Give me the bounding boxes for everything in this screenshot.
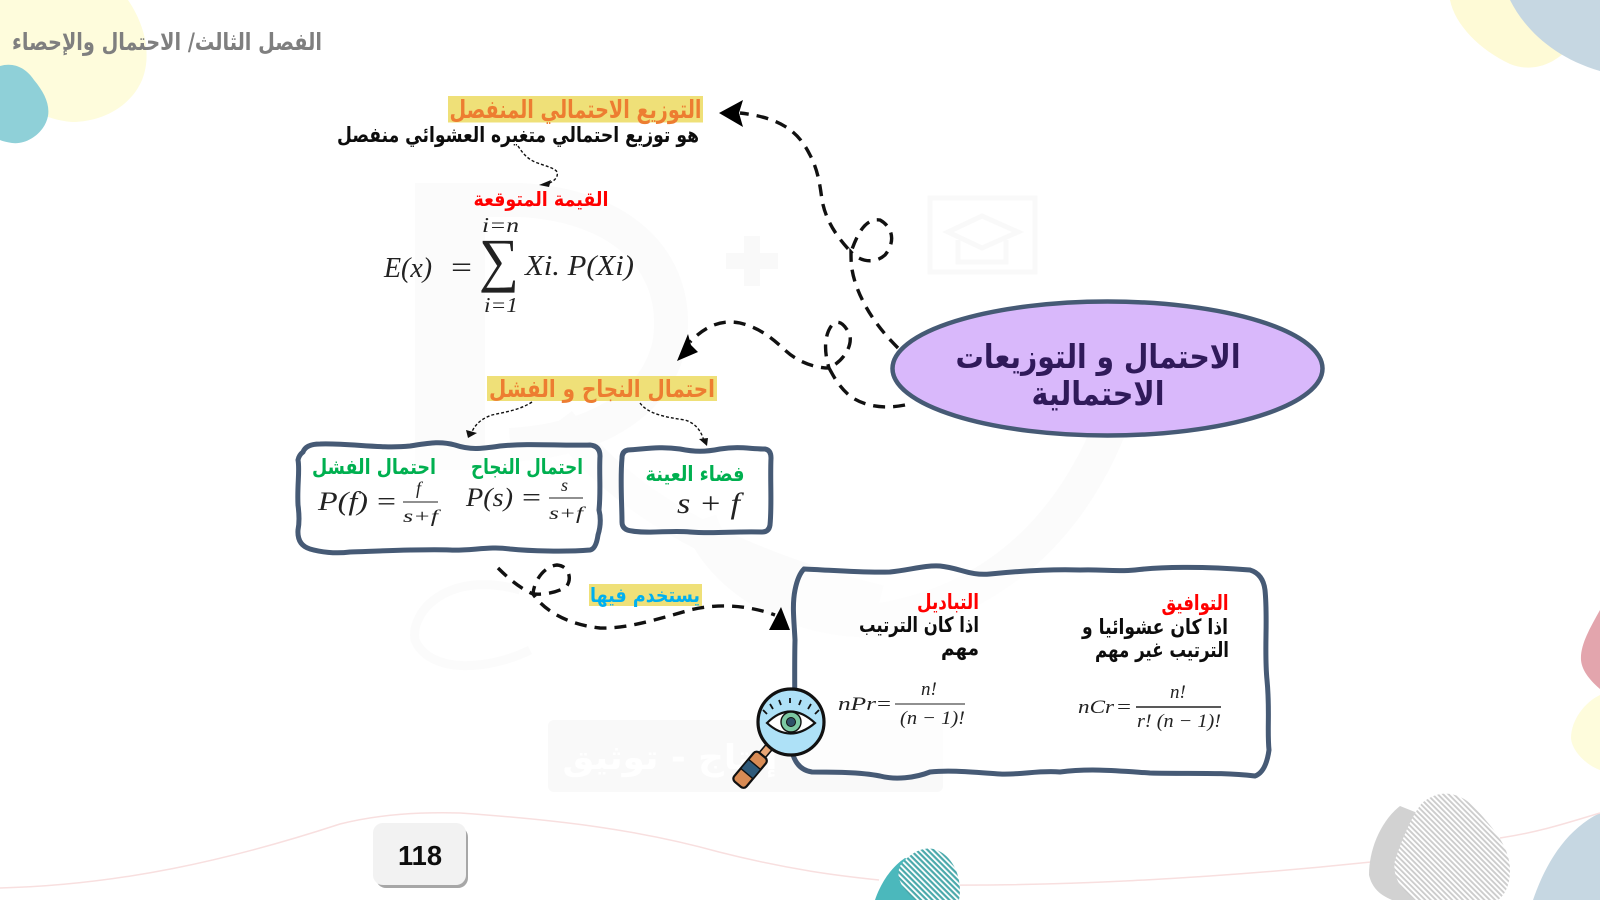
- permutations formula: [838, 679, 965, 729]
- combinations text: [1081, 591, 1229, 662]
- combinations text: التوافيق: [1162, 591, 1228, 615]
- failure formula: s+f: [403, 506, 442, 526]
- dashed arrow: boxes to combinatorics: [498, 565, 790, 630]
- combinations text: اذا كان عشوائيا و: [1081, 615, 1228, 639]
- success formula: P(s): [465, 483, 513, 512]
- success formula: s+f: [549, 503, 587, 523]
- central ellipse: main topic: الاحتمال و التوزيعات: [956, 337, 1240, 377]
- permutations text: اذا كان الترتيب: [859, 613, 979, 637]
- arrowhead: [677, 334, 698, 361]
- combinations text: الترتيب غير مهم: [1095, 638, 1229, 662]
- success formula: [465, 475, 587, 523]
- sample space label: فضاء العينة: [646, 462, 744, 486]
- expected value formula: i=n: [482, 213, 519, 237]
- page number badge: [373, 823, 468, 888]
- sample space formula: s + f: [677, 487, 744, 520]
- highlighted heading: التوزيع الاحتمالي المنفصل: [450, 95, 702, 125]
- small dashed arrow to expected value: [518, 146, 557, 187]
- permutations text: مهم: [941, 636, 979, 660]
- expected value formula: =: [451, 251, 472, 284]
- small dashed arrows to boxes: [466, 402, 708, 446]
- watermark: إنتاج - توثيق: [562, 738, 778, 778]
- central ellipse: main topic: الاحتمالية: [1032, 374, 1164, 413]
- page number badge: 118: [398, 840, 442, 871]
- permutations formula: n!: [921, 679, 937, 700]
- expected value formula: Xi. P(Xi): [524, 250, 634, 282]
- arrowhead: [719, 100, 743, 127]
- failure formula: [317, 478, 442, 526]
- permutations text: التباديل: [917, 590, 979, 614]
- expected value formula: ∑: [479, 227, 519, 293]
- expected value label: القيمة المتوقعة: [474, 187, 608, 211]
- watermark: [415, 198, 1120, 792]
- failure formula: f: [416, 478, 424, 498]
- panel: sample space: [621, 448, 771, 533]
- arrowhead: [769, 607, 790, 630]
- success formula: =: [522, 483, 541, 512]
- expected value formula: [383, 213, 634, 317]
- expected value formula: E(x): [383, 252, 432, 284]
- panel: probability of success and failure: [298, 443, 600, 553]
- combinations formula: =: [1117, 697, 1131, 718]
- expected value formula: i=1: [484, 293, 518, 317]
- used-in label: يستخدم فيها: [590, 583, 700, 607]
- dashed arrow: ellipse to success and failure: [677, 322, 905, 407]
- combinations formula: [1078, 682, 1221, 732]
- failure formula: P(f): [317, 487, 368, 516]
- failure formula: =: [377, 487, 396, 516]
- success and failure heading: احتمال النجاح و الفشل: [489, 375, 715, 403]
- permutations text: [859, 590, 979, 660]
- dashed arrow: ellipse to discrete distribution: [719, 100, 898, 348]
- header: chapter title: الفصل الثالث/ الاحتمال والإحصاء: [12, 28, 322, 56]
- permutations formula: =: [877, 694, 891, 715]
- panel: permutations and combinations: [793, 566, 1269, 778]
- combinations formula: nCr: [1078, 697, 1115, 718]
- combinations formula: n!: [1170, 682, 1186, 703]
- section: discrete probability distribution: [337, 95, 703, 147]
- definition text: هو توزيع احتمالي متغيره العشوائي منفصل: [337, 123, 699, 147]
- success label: احتمال النجاح: [471, 455, 583, 479]
- icon: magnifying glass with eye: [732, 689, 824, 789]
- combinations formula: r! (n − 1)!: [1137, 711, 1221, 732]
- success formula: s: [561, 475, 568, 495]
- permutations formula: nPr: [838, 694, 877, 715]
- central ellipse: main topic: [892, 302, 1322, 436]
- failure label: احتمال الفشل: [312, 455, 436, 479]
- permutations formula: (n − 1)!: [900, 708, 965, 729]
